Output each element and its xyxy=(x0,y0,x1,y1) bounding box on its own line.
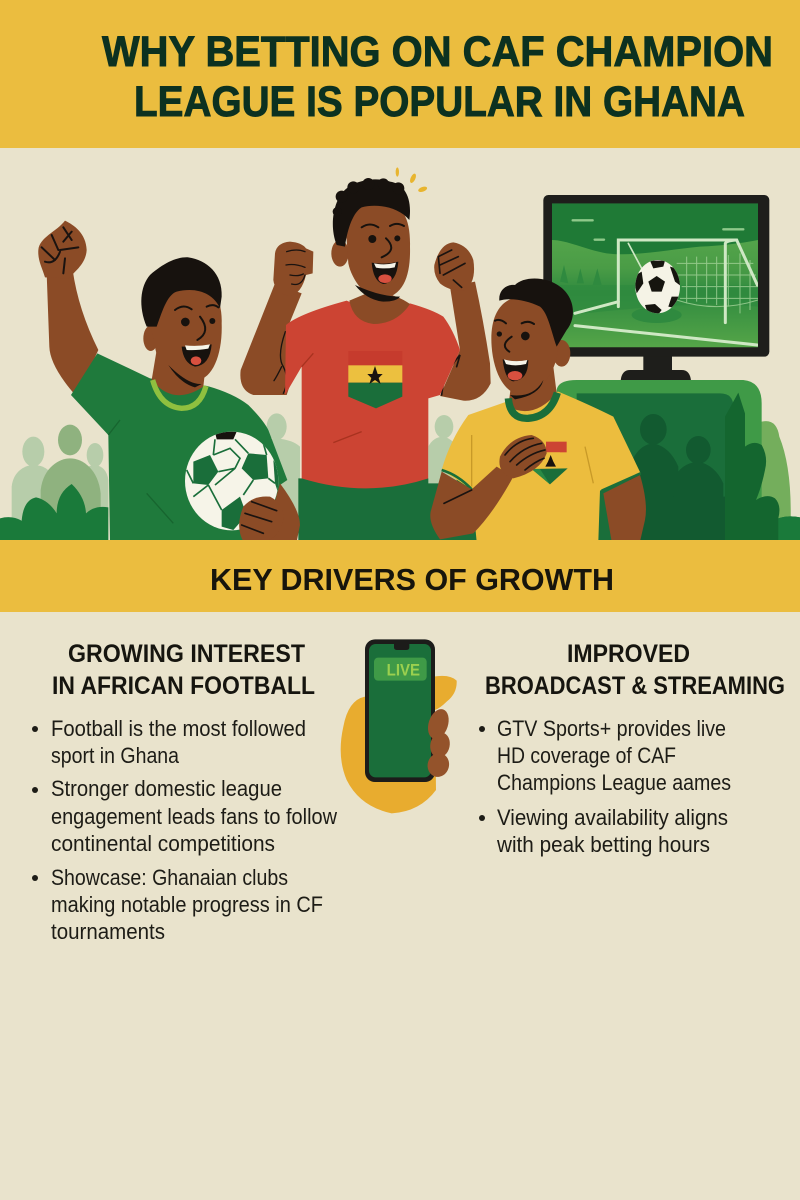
bullet: most followed sport: Football is the most followed xyxy=(51,716,306,741)
green trousers xyxy=(298,478,477,542)
title banner xyxy=(0,0,800,148)
middle fan in red shirt xyxy=(240,178,491,542)
phone: LIVE xyxy=(387,660,420,679)
right raised arm xyxy=(434,242,491,401)
column heading: IMPROVED xyxy=(567,640,690,668)
Ghana flag pocket xyxy=(348,351,402,408)
yellow shirt xyxy=(442,392,641,542)
background bushes left xyxy=(0,484,108,542)
head xyxy=(491,278,573,399)
neck and collar xyxy=(508,367,557,411)
background crowd left xyxy=(12,413,300,520)
tv stand xyxy=(621,353,691,381)
phone xyxy=(365,639,435,782)
section banner: key drivers of growth xyxy=(0,540,800,612)
column heading: GROWING INTEREST xyxy=(68,640,305,668)
illustration: three fans cheering in front of a TV xyxy=(0,167,800,542)
green shirt xyxy=(71,353,287,542)
hand on ball xyxy=(239,496,283,542)
television xyxy=(543,195,769,381)
bullet: gtv sports+ coverage: Champions League aames xyxy=(497,770,731,795)
bullet: domestic league engagement: Stronger domestic league xyxy=(51,776,282,801)
bullet: viewing availability: Viewing availability aligns xyxy=(497,805,728,830)
bullet: gtv sports+ coverage: HD coverage of CAF xyxy=(497,743,676,768)
green sofa with crowd silhouettes xyxy=(557,380,800,542)
column heading: IN AFRICAN FOOTBALL xyxy=(52,672,315,700)
column heading xyxy=(485,640,785,700)
bullet: most followed sport: sport in Ghana xyxy=(51,743,180,768)
left raised arm xyxy=(240,242,313,395)
bullet: gtv sports+ coverage: GTV Sports+ provides live xyxy=(497,716,726,741)
column: growing interest in african football xyxy=(32,640,337,944)
football xyxy=(185,432,280,530)
bullet: most followed sport xyxy=(32,716,306,768)
raised arm xyxy=(38,221,98,397)
fist lines xyxy=(42,227,78,273)
head xyxy=(331,178,410,302)
bullet: domestic league engagement: engagement leads fans to follow xyxy=(51,804,337,829)
lower arm xyxy=(263,483,300,542)
cheer sparks xyxy=(396,167,428,193)
bullet: domestic league engagement: continental competitions xyxy=(51,831,275,856)
yellow hand xyxy=(341,676,457,813)
arm and hand on chest xyxy=(430,435,547,539)
column heading xyxy=(52,640,315,700)
icon: hand holding phone with live stream xyxy=(341,639,457,813)
chest flag xyxy=(532,442,568,484)
bullet: viewing availability xyxy=(479,805,728,857)
column: improved broadcast and streaming xyxy=(479,640,785,857)
red shirt xyxy=(285,301,460,488)
background silhouette xyxy=(428,415,457,483)
tv football xyxy=(635,260,680,314)
title: LEAGUE IS POPULAR IN GHANA xyxy=(134,78,745,126)
bullet: ghanaian clubs showcase: Showcase: Ghanaian clubs xyxy=(51,865,288,890)
bullet: gtv sports+ coverage xyxy=(479,716,731,795)
left fan in green shirt xyxy=(38,221,300,542)
neck and collar xyxy=(152,350,207,395)
fingers xyxy=(424,706,452,779)
right arm xyxy=(603,475,646,542)
bullet: ghanaian clubs showcase xyxy=(32,865,323,944)
tv screen xyxy=(552,203,758,347)
section heading: KEY DRIVERS OF GROWTH xyxy=(210,562,614,597)
right fan in yellow shirt xyxy=(428,278,646,542)
title xyxy=(102,28,773,126)
bullet: domestic league engagement xyxy=(32,776,337,856)
head xyxy=(141,257,222,387)
bullet: ghanaian clubs showcase: making notable progress in CF xyxy=(51,892,323,917)
bullet: viewing availability: with peak betting hours xyxy=(496,832,710,857)
bullet: ghanaian clubs showcase: tournaments xyxy=(51,919,165,944)
